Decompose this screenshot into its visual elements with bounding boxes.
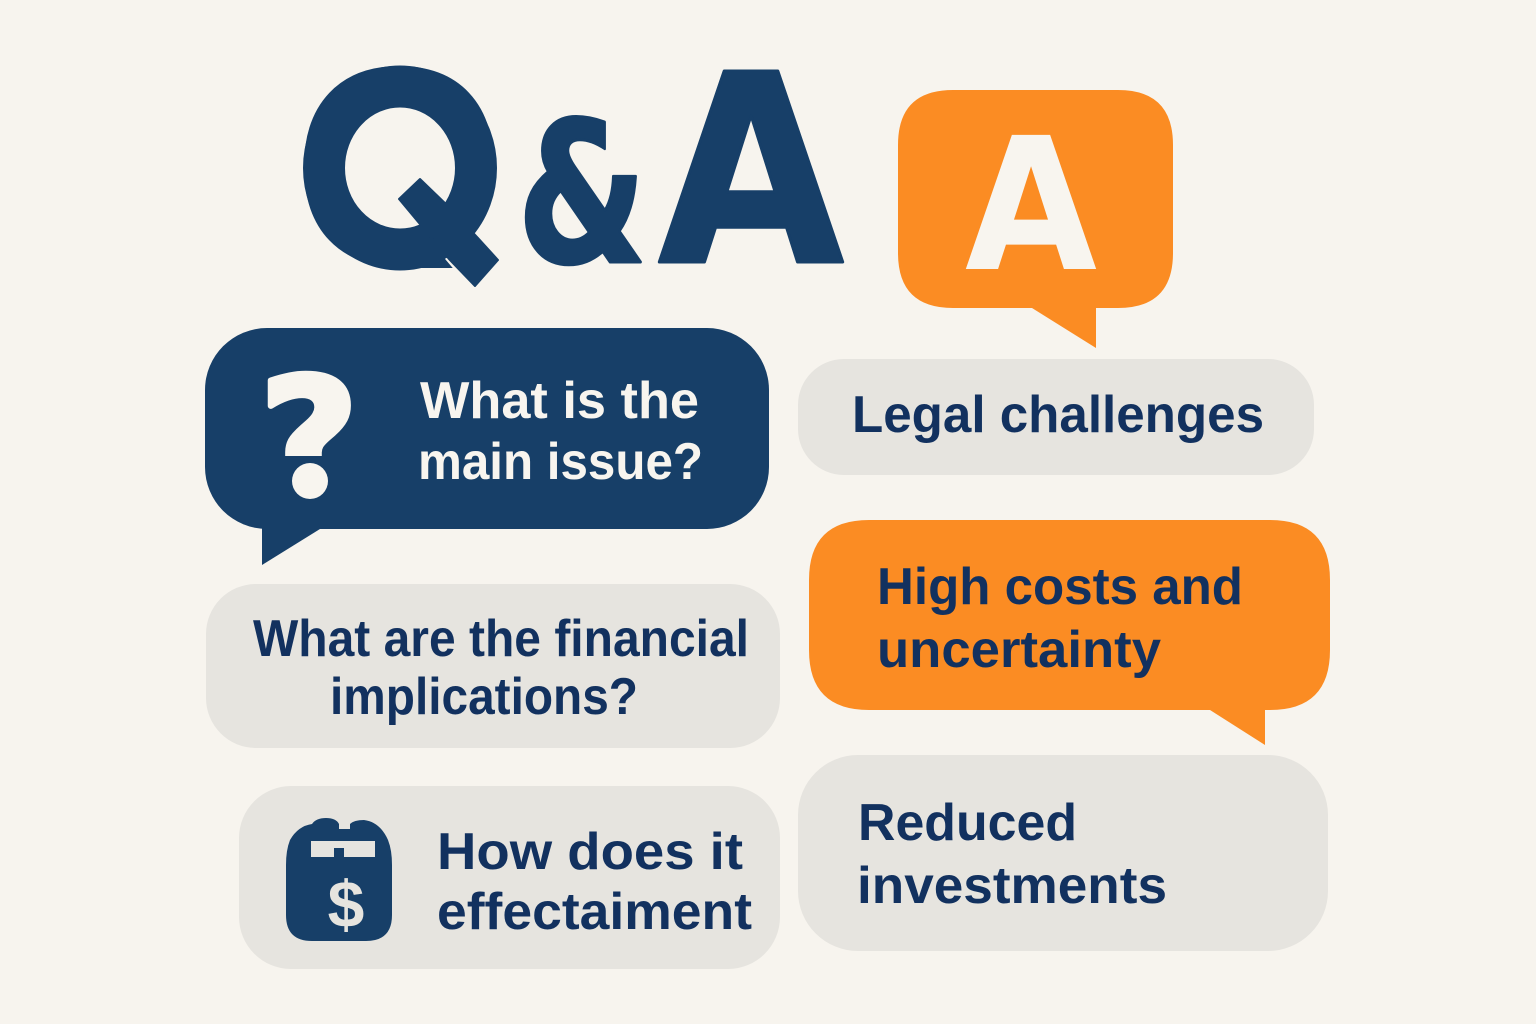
title: Q&A: & <box>517 81 647 309</box>
title: Q&A: A <box>658 19 846 324</box>
icon: question mark: ? <box>259 344 359 537</box>
question card: financial implications: implications? <box>330 668 638 726</box>
title: Q&A <box>303 66 844 287</box>
question card: how does it <box>239 786 780 969</box>
question card: how does it: effectaiment <box>437 883 752 941</box>
answer icon bubble: A <box>965 99 1097 313</box>
answer bubble: high costs: uncertainty <box>877 621 1161 679</box>
icon: dollar clipboard: $ <box>328 867 364 941</box>
answer card: reduced investments <box>798 755 1328 951</box>
title: Q&A: Q <box>293 19 505 324</box>
icon: question mark <box>268 370 351 499</box>
answer bubble: high costs <box>809 520 1330 745</box>
question card: financial implications <box>206 584 780 748</box>
answer bubble: high costs: High costs and <box>877 558 1243 616</box>
question text: main issue: What is the <box>420 372 699 430</box>
icon: dollar clipboard <box>286 818 392 941</box>
answer card: reduced investments: Reduced <box>858 794 1077 852</box>
question card: financial implications: What are the financial <box>253 610 749 668</box>
answer icon bubble <box>898 90 1173 348</box>
question bubble: main issue <box>205 328 769 565</box>
answer card: legal challenges: Legal challenges <box>852 386 1264 444</box>
question text: main issue: main issue? <box>418 433 703 491</box>
question card: how does it: How does it <box>437 823 743 881</box>
question text: main issue <box>418 372 703 491</box>
answer card: reduced investments: investments <box>857 857 1167 915</box>
answer card: legal challenges <box>798 359 1314 475</box>
